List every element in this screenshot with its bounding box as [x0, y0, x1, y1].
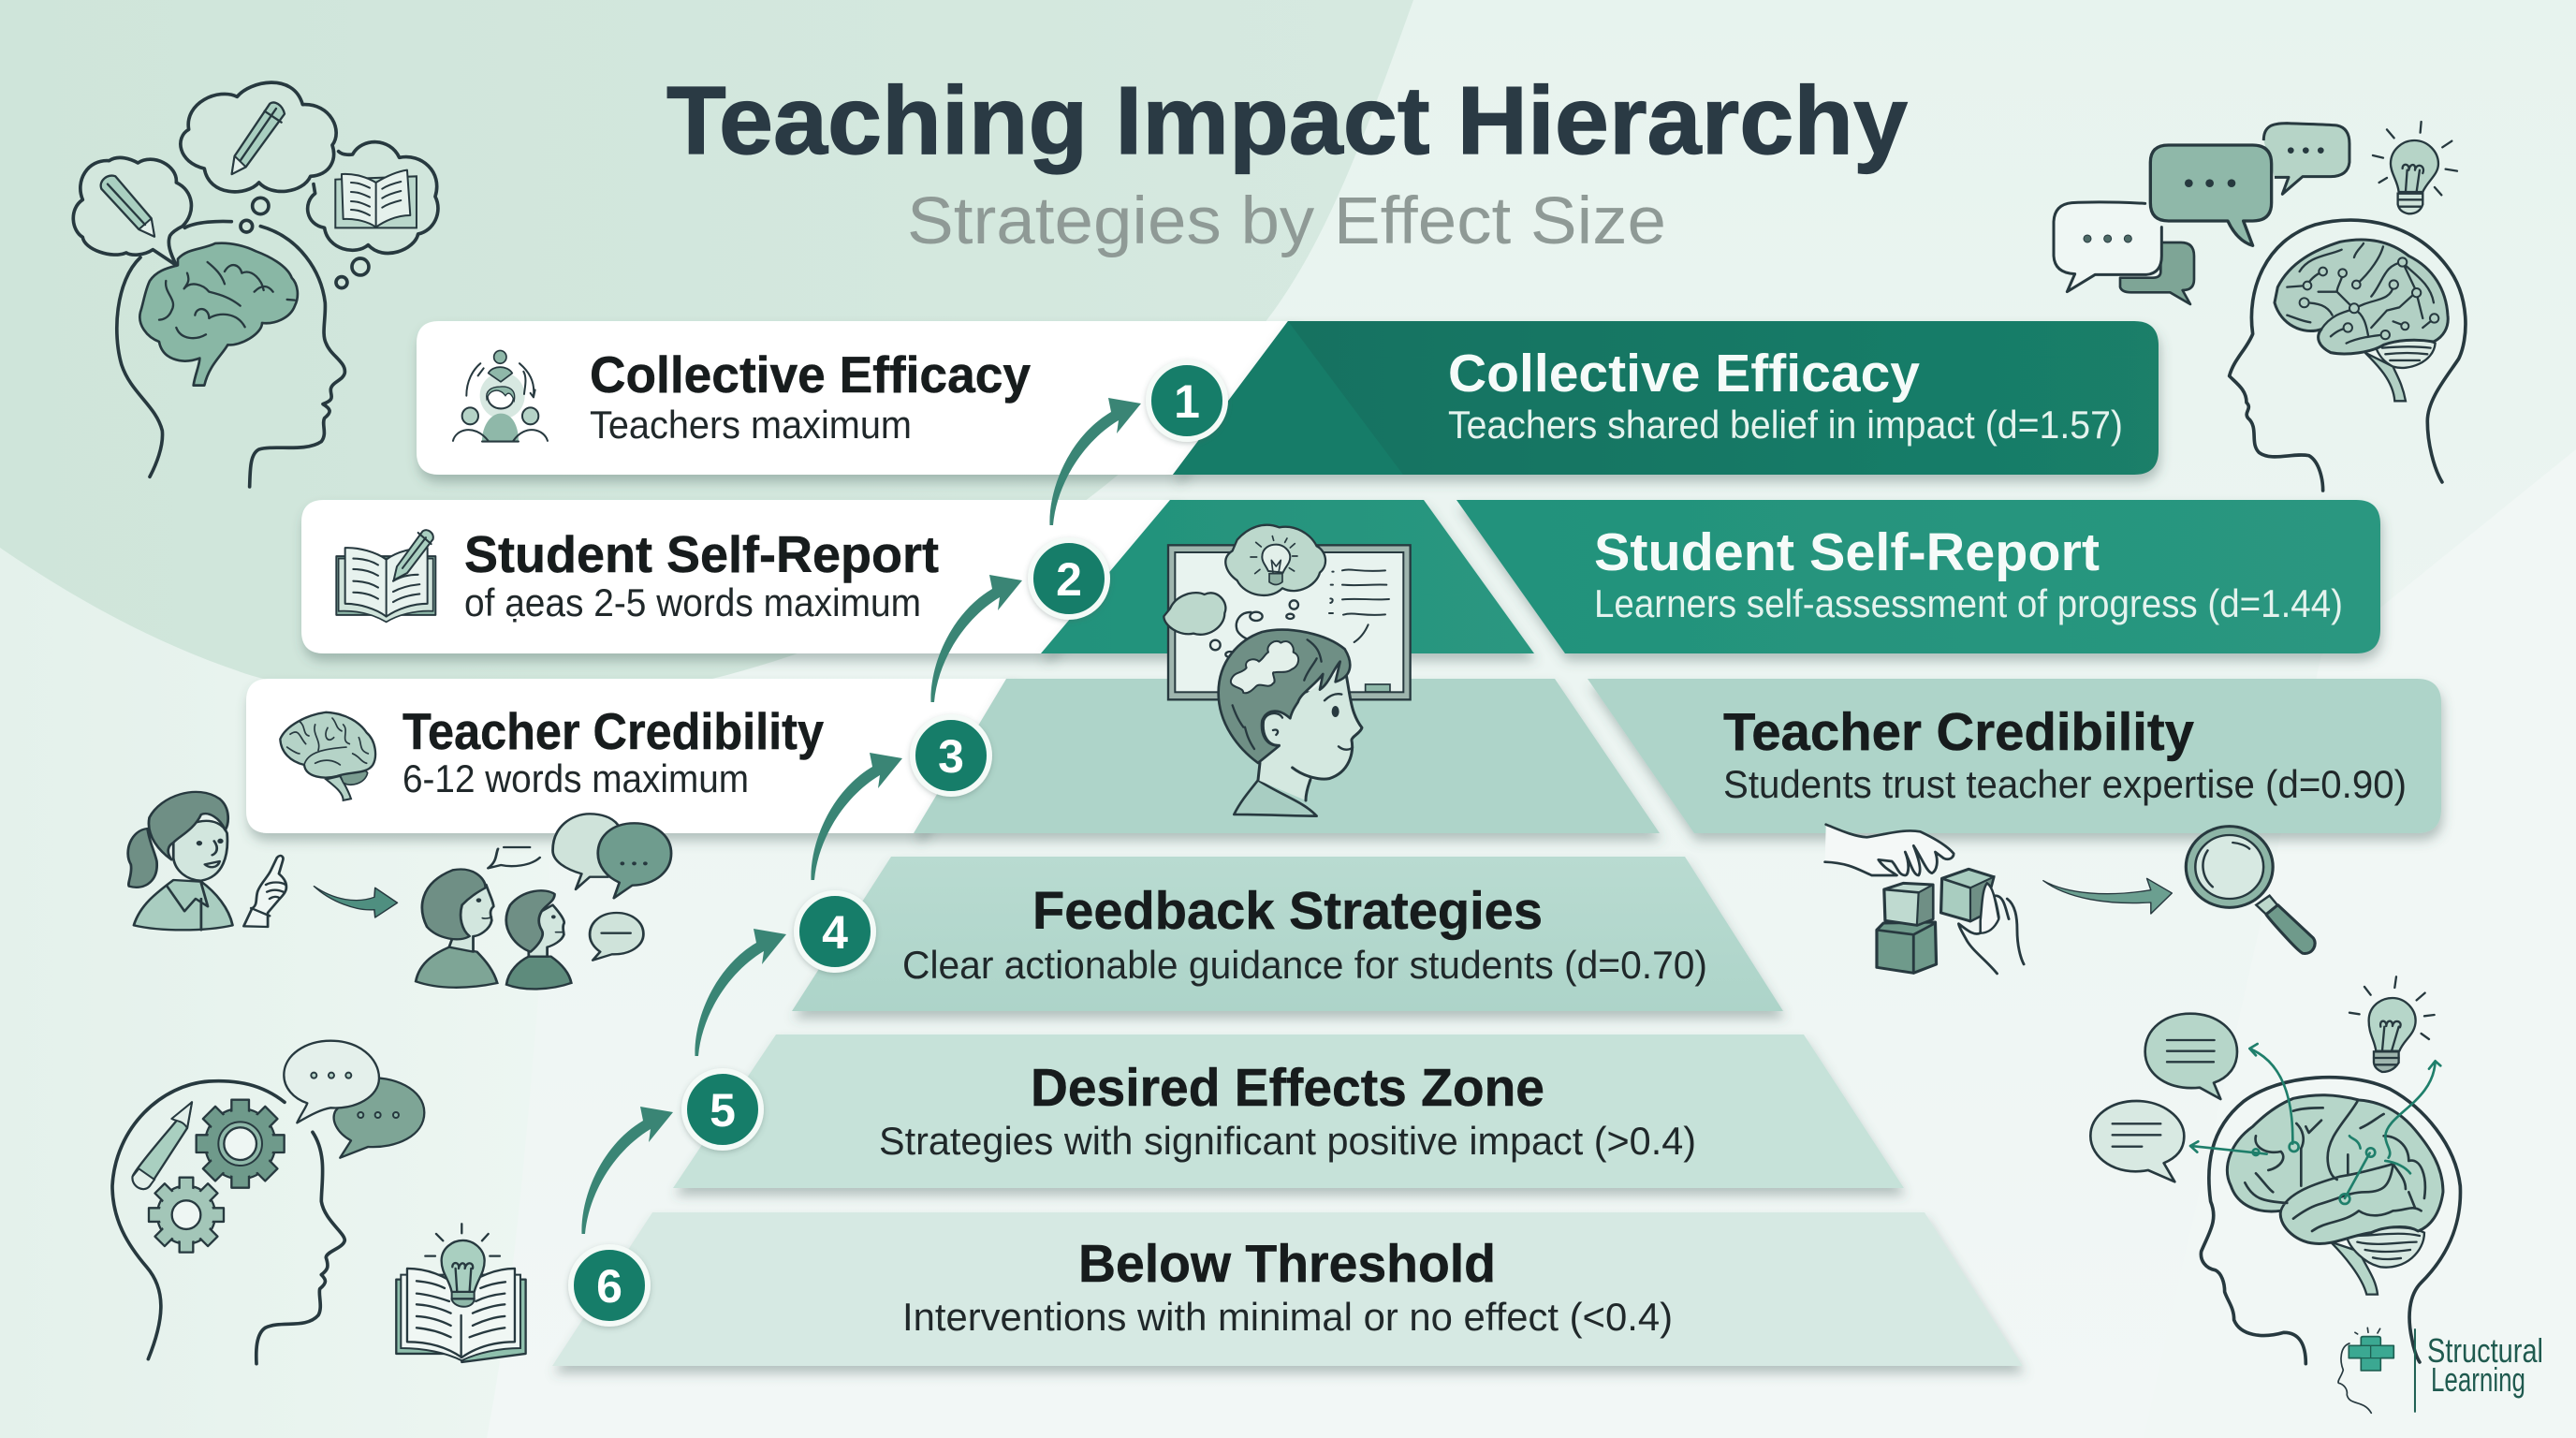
- icon: lightbulb: [2373, 122, 2457, 213]
- panel: white label 1: [417, 321, 1296, 475]
- number badge 5: [684, 1071, 761, 1148]
- panel text: Teacher Credibility right: [1723, 702, 2407, 806]
- teacher: [128, 792, 233, 930]
- panel: tier 2 right: [1456, 500, 2380, 653]
- brain: [139, 243, 298, 386]
- thought cloud: pencil: [181, 82, 336, 192]
- panel text: Student Self-Report right: [1594, 522, 2343, 625]
- pencil: [133, 1102, 192, 1189]
- tier text: Feedback Strategies: Clear actionable guidance for students (d=0.70): [902, 943, 1707, 987]
- number badge 3: 3: [938, 730, 964, 783]
- magnifying glass: [2186, 827, 2315, 953]
- brain: [2227, 1095, 2443, 1295]
- thought cloud: lightbulb: [1225, 525, 1325, 595]
- tier text: Below Threshold: Interventions with minimal or no effect (<0.4): [902, 1295, 1673, 1339]
- label text: Student Self-Report left: of ạeas 2-5 words maximum: [464, 580, 921, 624]
- number badge 6: [571, 1247, 648, 1324]
- head outline: [112, 1081, 344, 1364]
- head outline: [2230, 220, 2466, 491]
- icon: collective group: [453, 350, 548, 442]
- thought cloud: book: [308, 142, 438, 253]
- icon: open book with lightbulb: [396, 1224, 526, 1362]
- arrow 4 to 3: [811, 753, 902, 880]
- panel text: Teacher Credibility right: Teacher Credibility: [1723, 702, 2194, 762]
- number badge 4: 4: [822, 906, 848, 959]
- icon: lightbulb: [2349, 976, 2435, 1072]
- label text: Teacher Credibility left: Teacher Credibility: [402, 702, 824, 760]
- label text: Collective Efficacy left: Collective Efficacy: [590, 345, 1031, 404]
- number badge 1: 1: [1174, 375, 1200, 428]
- arrow 2 to 1: [1049, 398, 1141, 525]
- label text: Student Self-Report left: [464, 525, 939, 624]
- speech bubble: mid green: [2150, 145, 2272, 245]
- pyramid tier 1: apex and right panel: [1173, 321, 2159, 475]
- panel: tier 3 right: [1588, 679, 2441, 833]
- panel text: Collective Efficacy right: Collective Efficacy: [1448, 344, 1920, 404]
- number badge 3: [913, 717, 989, 794]
- speech bubble: dark: [334, 1078, 424, 1158]
- brain with circuit nodes: [2275, 240, 2448, 401]
- tier text: Desired Effects Zone: Desired Effects Zone: [1031, 1058, 1544, 1118]
- panel text: Student Self-Report right: Learners self-assessment of progress (d=1.44): [1594, 581, 2343, 625]
- speech bubbles: [488, 814, 671, 961]
- number badge 1: [1149, 362, 1225, 439]
- speech bubble: dark back: [2120, 242, 2194, 304]
- speech bubble: small light: [2263, 124, 2349, 194]
- pyramid tier 2: [1041, 500, 1534, 653]
- label text: Collective Efficacy left: [590, 345, 1031, 447]
- hands: [1825, 825, 2024, 974]
- panel text: Student Self-Report right: Student Self-Report: [1594, 522, 2100, 582]
- number badge 4: [797, 893, 873, 970]
- illustration: head with gears: [112, 1041, 526, 1364]
- tier text: Below Threshold: Below Threshold: [1078, 1234, 1496, 1294]
- panel: white label 3: [246, 679, 1016, 833]
- icon: book with pencil: [336, 530, 435, 622]
- tier text: Feedback Strategies: Feedback Strategies: [1032, 881, 1543, 941]
- gear large: [197, 1100, 285, 1188]
- panel text: Collective Efficacy right: Teachers shared belief in impact (d=1.57): [1448, 403, 2123, 447]
- thought cloud: pencil small: [73, 157, 191, 265]
- thought dots: [241, 198, 369, 288]
- gear small: [149, 1178, 224, 1253]
- students: [416, 870, 571, 989]
- logo text: Structural: Structural: [2427, 1331, 2543, 1370]
- label text: Teacher Credibility left: 6-12 words maximum: [402, 756, 749, 800]
- green pathway arrows: [2190, 1044, 2440, 1204]
- pyramid tier 4: [792, 857, 1783, 1011]
- logo text: Learning: Learning: [2431, 1360, 2525, 1399]
- icon: brain: [280, 712, 375, 800]
- number badge 2: [1031, 540, 1107, 617]
- pyramid tier 5: [673, 1034, 1904, 1188]
- panel text: Collective Efficacy right: [1448, 344, 2123, 447]
- arrow 3 to 2: [930, 575, 1022, 702]
- number badge 2: 2: [1056, 553, 1082, 606]
- head outline: [2201, 1078, 2460, 1364]
- tier text: Below Threshold: [902, 1234, 1673, 1339]
- number badge 5: 5: [710, 1084, 736, 1137]
- blocks: [1877, 869, 1998, 973]
- illustration: central student with board: [1164, 525, 1411, 816]
- speech bubble: light: [284, 1041, 379, 1123]
- panel text: Teacher Credibility right: Students trust teacher expertise (d=0.90): [1723, 762, 2407, 806]
- speech bubble: left: [2090, 1101, 2184, 1181]
- head outline: [117, 221, 344, 487]
- hand pointing: [243, 856, 286, 927]
- tier text: Desired Effects Zone: [879, 1058, 1696, 1163]
- arrow 6 to 5: [581, 1107, 673, 1234]
- panel: white label 2: [301, 500, 1179, 653]
- illustration: teacher explaining to students: [128, 792, 671, 989]
- tier text: Feedback Strategies: [902, 881, 1707, 987]
- pyramid tier 3: [914, 679, 1660, 833]
- label text: Student Self-Report left: Student Self-Report: [464, 525, 939, 583]
- illustration: hands with blocks: [1825, 825, 2315, 974]
- speech bubble: top: [2145, 1014, 2237, 1099]
- speech bubble: white: [2054, 202, 2161, 292]
- arrow: [2043, 878, 2172, 914]
- illustration: head with brain pathways: [2090, 976, 2460, 1413]
- number badge 6: 6: [596, 1260, 622, 1313]
- arrow: [314, 887, 397, 917]
- whiteboard: [1168, 545, 1411, 699]
- label text: Collective Efficacy left: Teachers maximum: [590, 403, 912, 447]
- illustration: head with speech bubbles and circuit brain, top right: [2054, 122, 2466, 491]
- thought cloud: blank: [1164, 593, 1225, 635]
- thought dots: [1210, 600, 1298, 657]
- illustration: head with thought clouds, top left: [73, 82, 438, 487]
- subtitle: Strategies by Effect Size: [907, 184, 1666, 258]
- arrow 5 to 4: [695, 929, 786, 1056]
- label text: Teacher Credibility left: [402, 702, 824, 800]
- pyramid tier 6: [552, 1212, 2023, 1366]
- logo: Structural Learning: [2338, 1328, 2415, 1413]
- student: [1219, 630, 1362, 816]
- title: Teaching Impact Hierarchy: [666, 66, 1908, 174]
- tier text: Desired Effects Zone: Strategies with significant positive impact (>0.4): [879, 1119, 1696, 1163]
